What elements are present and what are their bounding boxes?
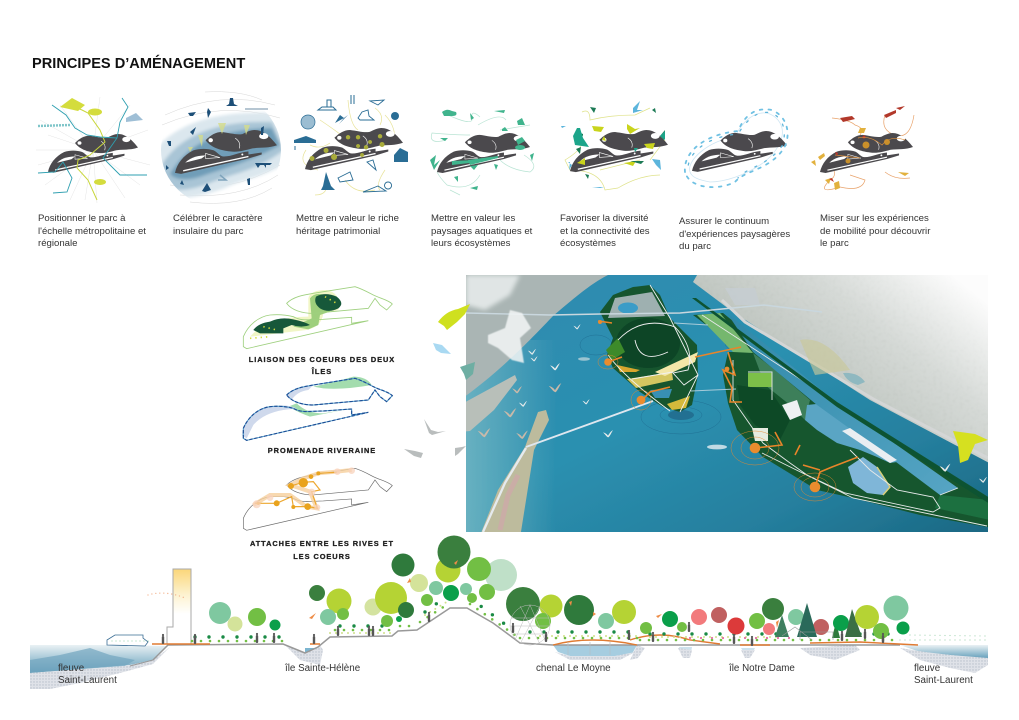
diagram: metropolitan scale bbox=[36, 97, 150, 203]
biosphere dome bbox=[510, 605, 550, 645]
river right bbox=[900, 645, 988, 659]
text: metropolitan scale: l'échelle métropolitaine et bbox=[38, 226, 146, 237]
trees bbox=[209, 536, 910, 639]
river water bbox=[460, 270, 995, 538]
orange birds bbox=[309, 560, 779, 628]
icon: leaf bird bbox=[460, 362, 475, 380]
text: mobility: de mobilité pour découvrir bbox=[820, 226, 931, 237]
port jetties bbox=[466, 375, 517, 432]
label: fleuve Saint-Laurent right: Saint-Laurent bbox=[914, 675, 973, 686]
text: aquatic landscapes: paysages aquatiques et bbox=[431, 226, 533, 237]
mini map: links between shores and hearts bbox=[243, 467, 392, 530]
icon: grey birds bbox=[404, 419, 466, 458]
text: biodiversity: Favoriser la diversité bbox=[560, 213, 649, 224]
orange connections and nodes bbox=[598, 321, 858, 487]
diagram: aquatic landscapes bbox=[430, 110, 534, 195]
diagram: mobility bbox=[811, 106, 914, 190]
caption: liaison of hearts: LIAISON DES COEURS DES DEUX bbox=[249, 355, 395, 364]
text: aquatic landscapes: leurs écosystèmes bbox=[431, 238, 511, 249]
rowing basin bbox=[727, 313, 958, 495]
ripples around islands bbox=[580, 334, 732, 434]
diagram: heritage bbox=[294, 95, 408, 195]
icon: yellow bird left bbox=[438, 304, 470, 330]
label: fleuve Saint-Laurent left: fleuve bbox=[58, 663, 85, 674]
understory dots bbox=[112, 593, 988, 641]
boat bbox=[107, 635, 148, 646]
ile Sainte-Helene bbox=[600, 285, 698, 412]
people bbox=[162, 612, 884, 646]
ground line bbox=[153, 608, 900, 660]
mini map: liaison of hearts bbox=[243, 287, 392, 349]
title: PRINCIPES D’AMÉNAGEMENT bbox=[32, 55, 245, 72]
aerial view bbox=[460, 270, 995, 538]
bridges bbox=[466, 305, 822, 315]
diagram: insular character bbox=[161, 92, 281, 204]
text: insular character: Célébrer le caractère bbox=[173, 213, 263, 224]
orange walkways bbox=[152, 635, 918, 645]
text: metropolitan scale: régionale bbox=[38, 238, 77, 249]
diagram: biodiversity bbox=[561, 101, 668, 190]
text: landscape continuum: Assurer le continuum bbox=[679, 216, 769, 227]
gulls bbox=[519, 324, 987, 483]
mini map: riverside promenade bbox=[242, 377, 392, 440]
white paths and buildings bbox=[702, 315, 987, 526]
text: landscape continuum: du parc bbox=[679, 241, 711, 252]
beds bbox=[285, 645, 323, 665]
thin dike strip bbox=[692, 298, 993, 506]
label: fleuve Saint-Laurent right: fleuve bbox=[914, 663, 941, 674]
planted areas bbox=[748, 373, 772, 387]
text: insular character: insulaire du parc bbox=[173, 226, 244, 237]
text: mobility: Miser sur les expériences bbox=[820, 213, 929, 224]
riverbed left bbox=[30, 647, 170, 689]
tower bbox=[167, 569, 191, 644]
city texture bbox=[693, 270, 995, 466]
translucent white bird bbox=[488, 310, 531, 363]
text: biodiversity: écosystèmes bbox=[560, 238, 616, 249]
icon: pale blue bird bbox=[433, 343, 451, 354]
label: chenal Le Moyne: chenal Le Moyne bbox=[536, 663, 611, 674]
text: heritage: héritage patrimonial bbox=[296, 226, 380, 237]
left bank bbox=[466, 275, 608, 396]
caption: links between shores and hearts: ATTACHES ENTRE LES RIVES ET bbox=[250, 539, 394, 548]
ile Notre-Dame bbox=[693, 313, 993, 528]
text: biodiversity: et la connectivité des bbox=[560, 226, 650, 237]
caption: liaison of hearts: ÎLES bbox=[311, 367, 332, 376]
label: ile Sainte-Helene: île Sainte-Hélène bbox=[284, 663, 361, 674]
text: mobility: le parc bbox=[820, 238, 849, 249]
text: heritage: Mettre en valeur le riche bbox=[296, 213, 399, 224]
interior basin and lake bbox=[805, 402, 897, 463]
text: aquatic landscapes: Mettre en valeur les bbox=[431, 213, 515, 224]
diagram: landscape continuum bbox=[685, 109, 788, 187]
text: landscape continuum: d'expériences paysagères bbox=[679, 229, 790, 240]
cross-section bbox=[30, 536, 988, 689]
shore road bbox=[722, 300, 988, 458]
label: fleuve Saint-Laurent left: Saint-Laurent bbox=[58, 675, 117, 686]
label: ile Notre Dame: île Notre Dame bbox=[728, 663, 795, 674]
caption: links between shores and hearts: LES COEURS bbox=[293, 552, 351, 561]
river left bbox=[30, 645, 168, 673]
icon: yellow bird right bbox=[953, 431, 988, 463]
small structure bbox=[782, 627, 833, 640]
caption: riverside promenade: PROMENADE RIVERAINE bbox=[268, 446, 376, 455]
channel water bbox=[553, 645, 637, 656]
bridge posts bbox=[568, 642, 610, 655]
right bank bbox=[693, 270, 995, 466]
text: metropolitan scale: Positionner le parc à bbox=[38, 213, 126, 224]
